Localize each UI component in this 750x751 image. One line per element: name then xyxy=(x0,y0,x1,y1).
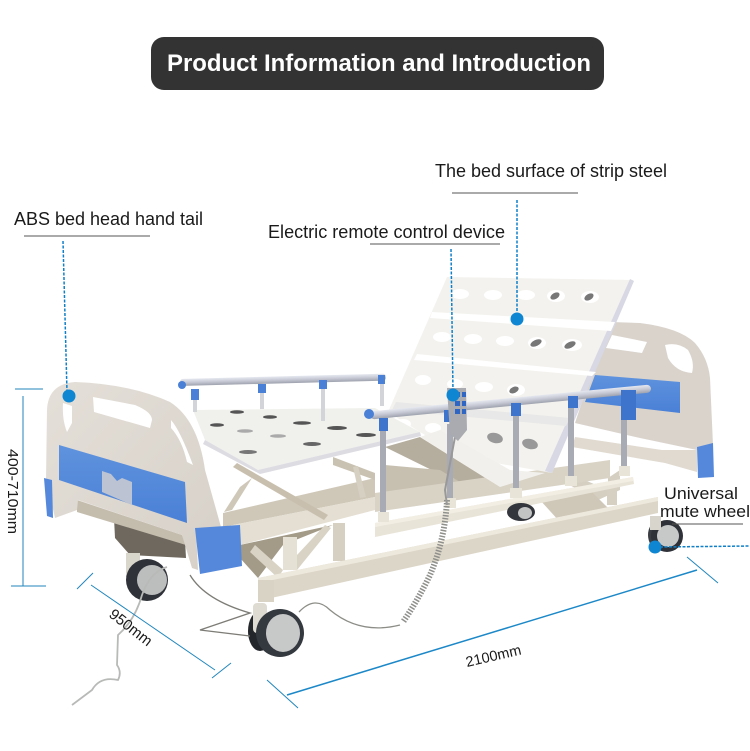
label: remote control xyxy=(268,222,505,402)
dimension: length: 2100mm xyxy=(464,643,523,671)
under frame xyxy=(223,437,617,578)
upper side frame xyxy=(223,497,375,545)
label: bed surface: The bed surface of strip steel xyxy=(435,161,667,181)
dimension: width: 950mm xyxy=(106,606,155,650)
label: remote control: Electric remote control device xyxy=(268,222,505,242)
backrest plate xyxy=(388,277,634,473)
far frame xyxy=(572,437,697,472)
bed illustration xyxy=(44,277,714,705)
head board (far end) xyxy=(575,322,714,478)
label: universal wheel: mute wheel xyxy=(660,502,750,521)
title xyxy=(151,37,604,90)
mid plate xyxy=(420,430,545,487)
label: universal wheel xyxy=(648,484,750,554)
far left wheel xyxy=(126,553,168,601)
dimension: length xyxy=(267,557,718,708)
right wheel xyxy=(648,516,683,552)
foot frame beam xyxy=(77,500,186,545)
label: bed head xyxy=(14,209,203,402)
strut xyxy=(233,463,328,520)
cables xyxy=(72,437,455,705)
lower long beam xyxy=(258,497,658,600)
title: Product Information and Introduction xyxy=(167,50,591,77)
label: universal wheel: Universal xyxy=(664,484,738,503)
dimension: width xyxy=(77,573,231,678)
near rail xyxy=(364,384,651,522)
far rail xyxy=(178,374,386,421)
label: bed surface xyxy=(435,161,667,326)
foot board xyxy=(44,382,242,574)
label: bed head: ABS bed head hand tail xyxy=(14,209,203,229)
motors xyxy=(114,518,186,558)
remote control xyxy=(447,388,467,441)
seat plate xyxy=(193,408,421,474)
near wheel xyxy=(248,603,304,657)
dimension: height: 400-710mm xyxy=(4,449,20,534)
mid wheel xyxy=(507,503,535,521)
